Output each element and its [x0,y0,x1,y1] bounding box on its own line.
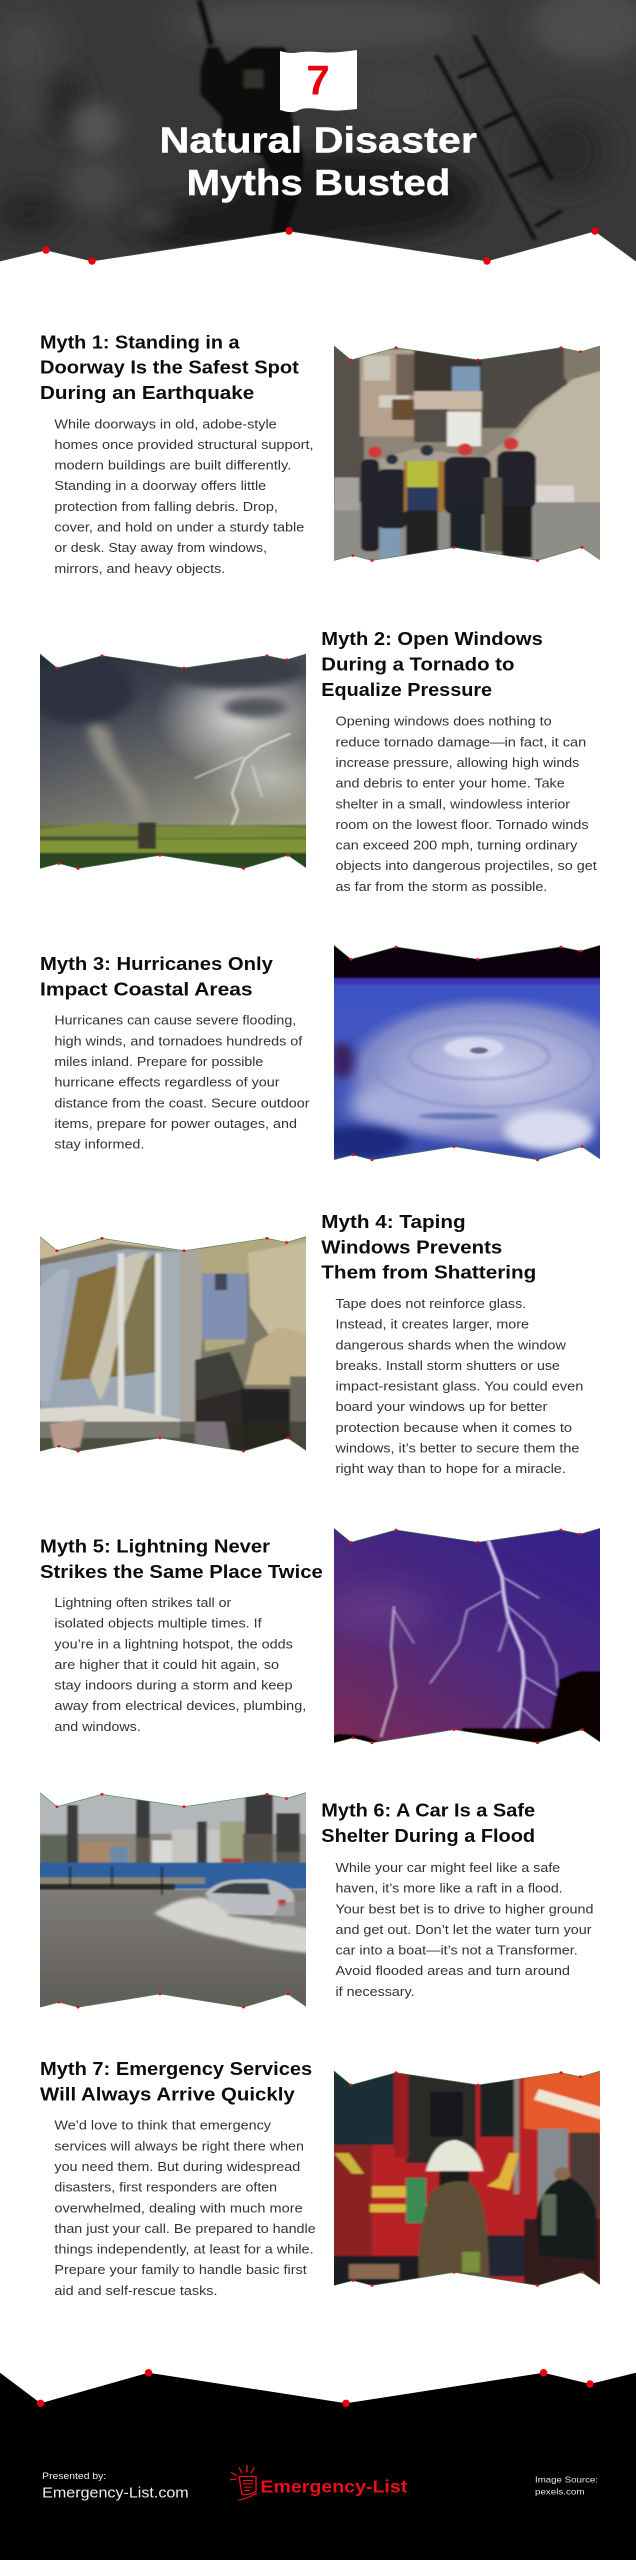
photo: car driving through flooded road [40,1792,306,2008]
heading: myth 5: Myth 5: Lightning Never [40,1535,270,1556]
text: myth 1 body: or desk. Stay away from windows, [54,541,267,555]
text: myth 4 body: breaks. Install storm shutters or use [336,1359,560,1373]
panel: myth 5 [40,1520,610,1751]
panel: myth 1 [40,331,610,576]
photo: firefighters beside a red fire engine [334,2070,600,2287]
panel: myth 3 [41,945,600,1162]
text: myth 1 body [54,417,314,576]
text: myth 4 body: board your windows up for better [336,1400,547,1414]
text: myth 7 body: aid and self-rescue tasks. [54,2284,218,2298]
text: myth 3 body: hurricane effects regardless of your [54,1076,280,1090]
text: myth 7 body: you need them. But during widespread [54,2160,300,2174]
text: myth 1 body: homes once provided structural support, [54,438,314,452]
footer [0,2369,636,2560]
text: myth 7 body: services will always be right there when [54,2139,304,2153]
heading: myth 4 [321,1211,536,1283]
text: myth 3 body: distance from the coast. Secure outdoor [54,1096,310,1110]
text: myth 4 body: right way than to hope for a miracle. [336,1462,566,1476]
text: myth 7 body [54,2119,316,2298]
text: myth 3 body: high winds, and tornadoes hundreds of [54,1034,303,1048]
header edge dots [0,227,636,265]
logo: Emergency-List [230,2465,407,2500]
text: myth 4 body: impact-resistant glass. You could even [336,1380,583,1394]
text: myth 3 body: items, prepare for power outages, and [54,1117,297,1131]
heading: myth 6: Shelter During a Flood [321,1825,535,1846]
heading: myth 7: Will Always Arrive Quickly [40,2083,296,2104]
text: myth 4 body: dangerous shards when the window [336,1338,567,1352]
text: myth 6 body: and get out. Don’t let the water turn your [336,1923,592,1937]
text: myth 5 body: isolated objects multiple times. If [54,1617,262,1631]
title [160,120,477,203]
text: myth 1 body: Standing in a doorway offers little [54,479,266,493]
heading: myth 5: Strikes the Same Place Twice [40,1561,323,1582]
text: myth 4 body: protection because when it comes to [336,1421,572,1435]
footer black band [0,2373,636,2560]
text: myth 5 body: are higher that it could hit again, so [54,1658,279,1672]
heading: myth 3: Impact Coastal Areas [40,979,253,1000]
text: myth 6 body: car into a boat—it’s not a Transformer. [336,1944,578,1958]
image source: pexels.com [535,2487,584,2497]
text: myth 3 body: miles inland. Prepare for possible [54,1055,263,1069]
text: myth 1 body: While doorways in old, adobe-style [54,417,277,431]
text: myth 1 body: modern buildings are built differently. [54,459,291,473]
header banner [0,0,636,271]
text: myth 1 body: mirrors, and heavy objects. [54,562,225,576]
heading: myth 4: Windows Prevents [321,1236,502,1257]
text: myth 5 body: stay indoors during a storm and keep [54,1679,293,1693]
number flag: 7 [306,56,330,104]
text: myth 4 body: Instead, it creates larger, more [336,1318,529,1332]
text: myth 2 body: shelter in a small, windowless interior [336,797,570,811]
text: myth 5 body [54,1596,306,1734]
text: myth 5 body: Lightning often strikes tall or [54,1596,231,1610]
text: myth 6 body: Avoid flooded areas and turn around [336,1964,570,1978]
presented by: Presented by: [42,2471,106,2482]
text: myth 7 body: than just your call. Be prepared to handle [54,2222,316,2236]
photo: tornado and lightning over fields [40,654,306,870]
text: myth 6 body [336,1861,594,1999]
logo: Emergency-List: Emergency-List [260,2477,407,2497]
heading: myth 6 [321,1800,535,1846]
text: myth 2 body: objects into dangerous projectiles, so get [336,859,597,873]
text: myth 4 body [334,1297,583,1476]
heading: myth 4: Myth 4: Taping [321,1211,466,1232]
text: myth 2 body: as far from the storm as possible. [336,880,547,894]
header photo: firefighter and ladder in smoke [0,0,636,271]
text: myth 2 body: can exceed 200 mph, turning ordinary [336,839,578,853]
presented by [42,2471,189,2502]
heading: myth 1: During an Earthquake [40,382,254,403]
text: myth 3 body [54,1014,310,1152]
text: myth 7 body: overwhelmed, dealing with much more [54,2201,303,2215]
image source [535,2475,598,2497]
text: myth 2 body [336,715,597,894]
text: myth 7 body: We’d love to think that emergency [54,2119,272,2133]
heading: myth 5 [40,1535,323,1582]
presented by: Emergency-List.com [42,2486,189,2502]
photo: collapsed building with rescue workers [334,346,600,562]
text: myth 6 body: While your car might feel like a safe [336,1861,560,1875]
photo: lightning bolts in purple sky [334,1528,600,1744]
heading: myth 4: Them from Shattering [321,1262,536,1283]
photo: shattered bay window with curtains [40,1236,306,1452]
text: myth 1 body: protection from falling debris. Drop, [54,500,278,514]
heading: myth 3 [40,953,274,1000]
text: myth 2 body: Opening windows does nothing to [336,715,552,729]
icon: checklist with rays [230,2465,257,2500]
panel: myth 2 [25,628,597,894]
heading: myth 2: Equalize Pressure [321,679,492,700]
image source: Image Source: [535,2475,598,2485]
panel: myth 7 [40,2058,610,2298]
heading: myth 7: Myth 7: Emergency Services [40,2058,312,2079]
text: myth 3 body: stay informed. [54,1138,144,1152]
heading: myth 2: During a Tornado to [321,654,514,675]
text: myth 3 body: Hurricanes can cause severe flooding, [54,1014,296,1028]
text: myth 5 body: you’re in a lightning hotspot, the odds [54,1637,293,1651]
text: myth 2 body: reduce tornado damage—in fact, it can [336,735,586,749]
text: myth 4 body: Tape does not reinforce glass. [336,1297,526,1311]
text: myth 7 body: disasters, first responders are often [54,2181,277,2195]
text: myth 6 body: Your best bet is to drive to higher ground [336,1902,594,1916]
text: myth 5 body: and windows. [54,1720,141,1734]
number flag [280,50,357,112]
text: myth 7 body: things independently, at least for a while. [54,2243,314,2257]
text: myth 2 body: increase pressure, allowing high winds [336,756,579,770]
heading: myth 1 [40,331,299,403]
heading: myth 2: Myth 2: Open Windows [321,628,543,649]
heading: myth 3: Myth 3: Hurricanes Only [40,953,274,974]
title: Natural Disaster [160,120,477,161]
title: Myths Busted [187,162,450,203]
heading: myth 6: Myth 6: A Car Is a Safe [321,1800,535,1821]
heading: myth 1: Myth 1: Standing in a [40,331,240,352]
text: myth 7 body: Prepare your family to handle basic first [54,2263,307,2277]
text: myth 6 body: haven, it’s more like a raft in a flood. [336,1882,563,1896]
photo: hurricane seen from orbit [334,945,600,1162]
text: myth 5 body: away from electrical devices, plumbing, [54,1699,306,1713]
text: myth 6 body: if necessary. [336,1985,415,1999]
text: myth 1 body: cover, and hold on under a sturdy table [54,520,304,534]
panel: myth 6 [30,1784,594,2015]
heading: myth 7 [40,2058,312,2104]
footer edge dots [37,2369,594,2407]
heading: myth 2 [321,628,543,700]
text: myth 2 body: room on the lowest floor. Tornado winds [336,818,589,832]
text: myth 4 body: windows, it’s better to secure them the [334,1442,579,1456]
text: myth 2 body: and debris to enter your home. Take [336,777,565,791]
panel: myth 4 [30,1211,583,1476]
heading: myth 1: Doorway Is the Safest Spot [40,357,299,378]
